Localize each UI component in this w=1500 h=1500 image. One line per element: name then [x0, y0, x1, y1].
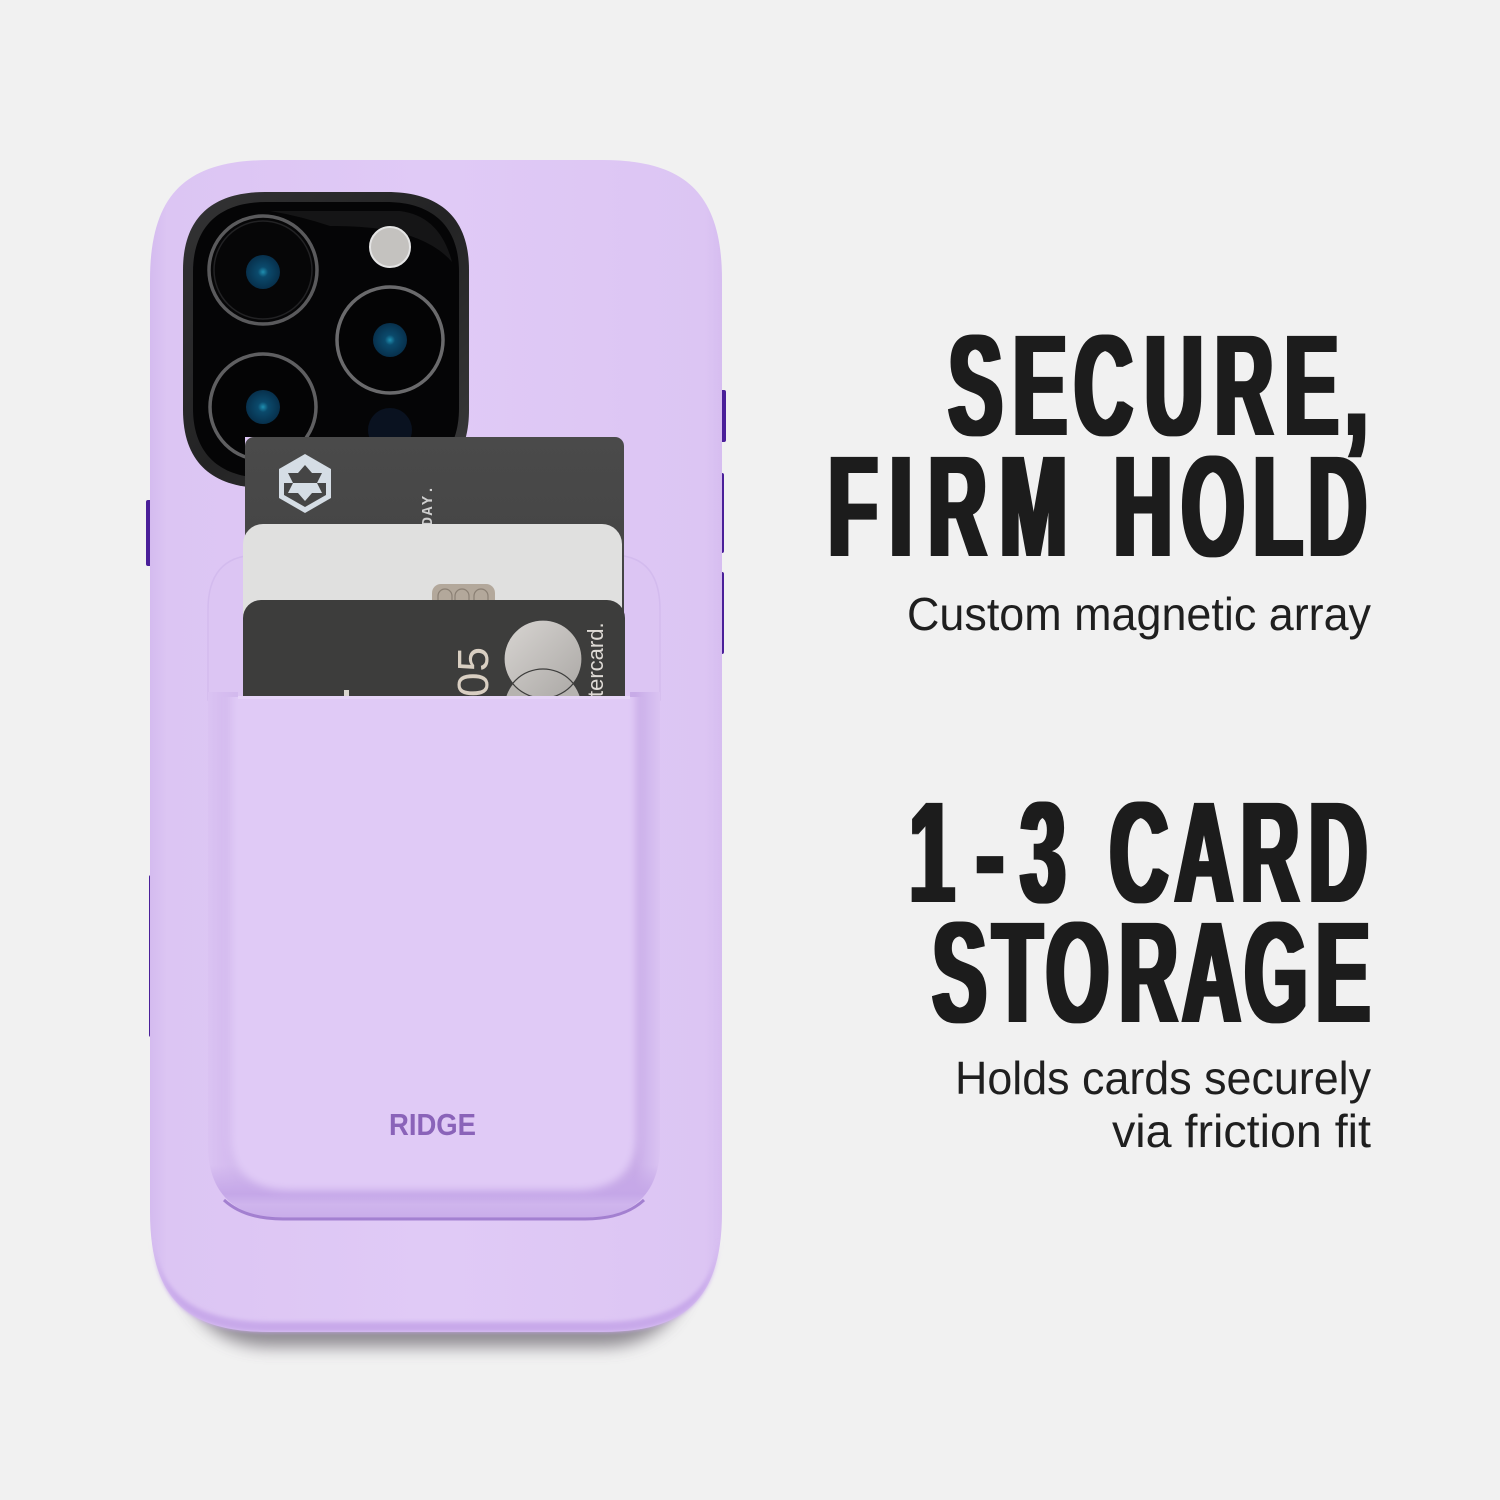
- heading: card storage: [910, 771, 1370, 1053]
- card brand text: tercard.: [583, 622, 608, 697]
- wallet back: [208, 555, 660, 700]
- icon: hexagon logo: [279, 454, 331, 513]
- wallet lower lip: [208, 1140, 660, 1218]
- case body: [150, 160, 722, 1332]
- card logo circles: [504, 620, 582, 696]
- drop shadow: [176, 1260, 696, 1347]
- side buttons: [146, 390, 726, 1037]
- lens 1: [209, 216, 317, 324]
- subtext: holds cards: Holds cards securely: [955, 1052, 1371, 1104]
- card: mastercard: [243, 600, 625, 696]
- subtext: holds cards: [955, 1052, 1371, 1157]
- wallet front pocket: [208, 660, 660, 1219]
- heading: secure firm hold: FIRM HOLD: [828, 425, 1367, 587]
- case bottom edge: [153, 1240, 719, 1332]
- card: white card: [243, 524, 622, 616]
- wallet outer shape: [208, 692, 660, 1218]
- pocket lip highlight: [238, 696, 630, 699]
- subtext: holds cards: via friction fit: [1112, 1105, 1371, 1157]
- subtext: custom magnetic array: Custom magnetic array: [907, 588, 1371, 640]
- card text: DAY.: [420, 484, 437, 526]
- brand logo: RIDGE: [389, 1107, 476, 1142]
- phone case: [146, 160, 726, 1347]
- card: black logo card: [245, 437, 624, 612]
- glass highlight: [270, 211, 452, 262]
- card number: 05: [449, 646, 498, 697]
- flash: [370, 227, 410, 267]
- lens 2: [337, 287, 443, 393]
- wallet bottom shadow: [224, 1200, 644, 1219]
- heading: card storage: 1-3 CARD: [910, 771, 1367, 933]
- heading: secure firm hold: [828, 304, 1368, 587]
- chip: [432, 584, 495, 600]
- heading: card storage: STORAGE: [933, 891, 1370, 1053]
- wallet face: [231, 660, 636, 1190]
- lidar: [368, 408, 412, 437]
- lens 3: [210, 354, 316, 460]
- camera module: [183, 192, 469, 488]
- heading: secure firm hold: SECURE,: [949, 304, 1368, 466]
- cards: [243, 437, 625, 696]
